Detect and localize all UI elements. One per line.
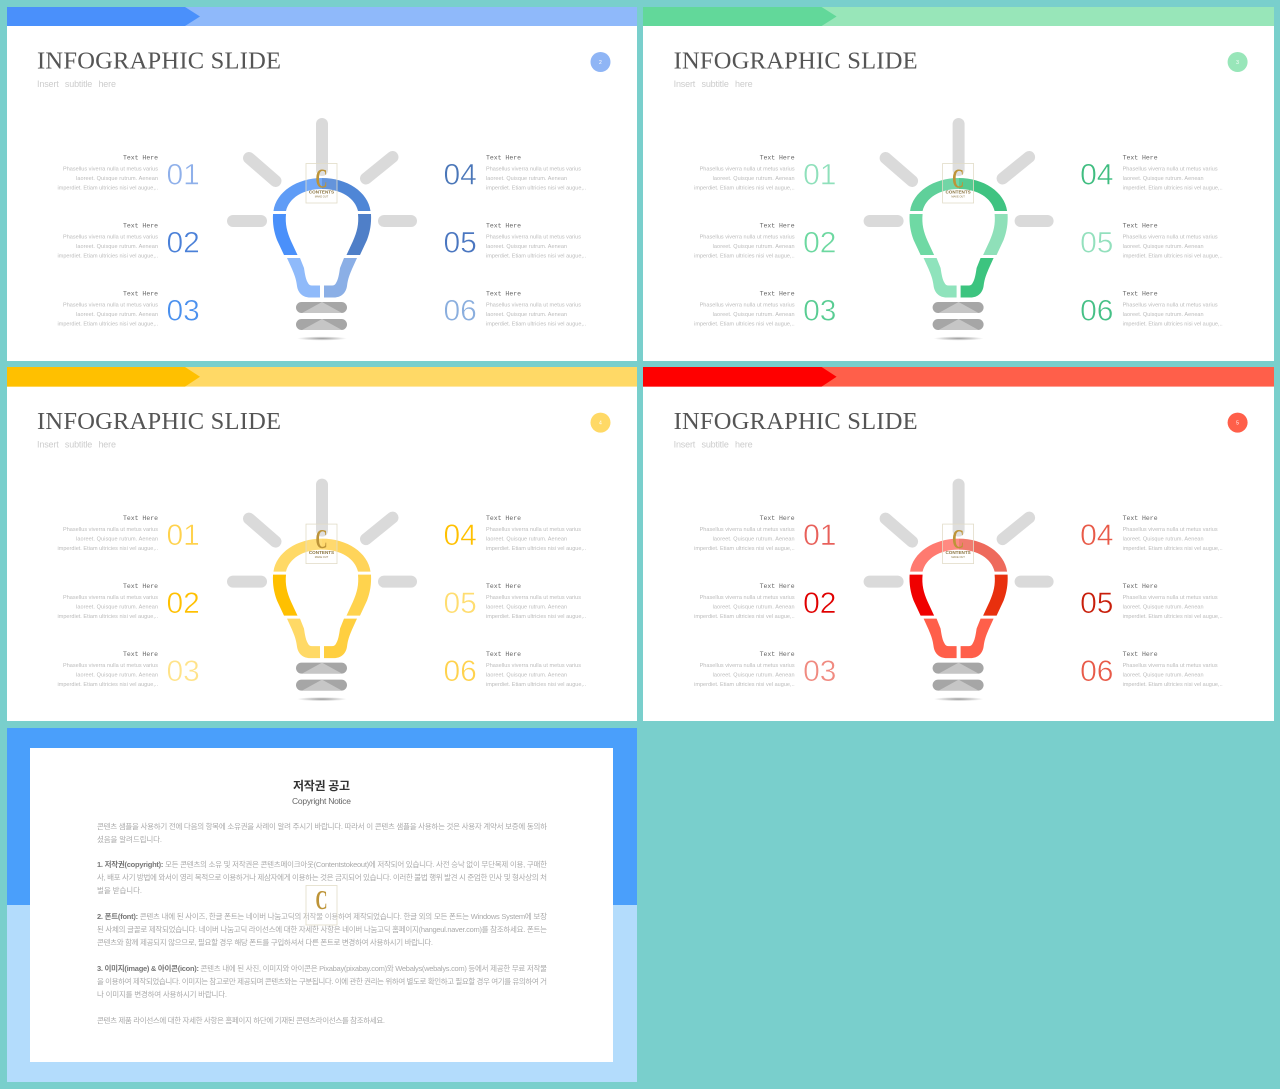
item 02: Text Here <box>760 222 795 230</box>
item 03: Text Here <box>123 651 158 658</box>
item 04: laoreet. Quisque rutrum. Aenean <box>486 176 567 182</box>
item 06 <box>444 651 586 688</box>
item 06 <box>1080 651 1223 688</box>
item 03: Phasellus viverra nulla ut metus varius <box>700 663 795 669</box>
page badge: 4 <box>599 421 602 427</box>
item 03: laoreet. Quisque rutrum. Aenean <box>76 673 158 679</box>
item 04 <box>1080 515 1223 552</box>
copyright subtitle: Copyright Notice <box>292 796 351 806</box>
item 04: Text Here <box>486 154 521 162</box>
item 04: Phasellus viverra nulla ut metus varius <box>486 527 581 533</box>
item 06: laoreet. Quisque rutrum. Aenean <box>486 312 567 318</box>
item 02: Phasellus viverra nulla ut metus varius <box>700 234 795 240</box>
section 1: copyright: 사, 배포 사기 방법에 와서이 영리 목적으로 이용하거나 제삼자에게 이용하는 것은 금지되어 있습니다. 이러한 불법 행위 발견 시 준엄한 민사 및 형사상의 처 <box>97 872 547 882</box>
watermark: CONTENTS <box>309 550 334 555</box>
item 06: imperdiet. Etiam ultricies nisi vel augue,.. <box>486 682 586 688</box>
panel: copyright notice <box>7 728 637 1082</box>
watermark <box>306 885 337 925</box>
item 02: imperdiet. Etiam ultricies nisi vel augue,.. <box>694 254 795 260</box>
item 04: 04 <box>1080 158 1113 192</box>
watermark: CONTENTS <box>945 550 971 555</box>
icon: light bulb <box>870 124 1048 340</box>
item 03: imperdiet. Etiam ultricies nisi vel augue,.. <box>694 322 795 328</box>
item 03: Phasellus viverra nulla ut metus varius <box>63 302 158 308</box>
item 03: Text Here <box>760 290 795 298</box>
item 05 <box>444 222 586 260</box>
item 04: imperdiet. Etiam ultricies nisi vel augue,.. <box>486 186 586 192</box>
item 06: 06 <box>1080 655 1113 688</box>
item 05: laoreet. Quisque rutrum. Aenean <box>1123 605 1204 611</box>
item 05: Phasellus viverra nulla ut metus varius <box>486 234 581 240</box>
item 01: Text Here <box>123 515 158 522</box>
icon: light bulb <box>870 485 1048 701</box>
title: INFOGRAPHIC SLIDE <box>674 48 918 74</box>
section 3: image and icon: 을 이용하여 제작되었습니다. 이미지는 참고로만 제공되며 콘텐츠와는 구분됩니다. 이에 관한 권리는 위하여 별도로 확인하고 필요할 경우 여기를 유의하여 거 <box>97 976 547 986</box>
item 01: imperdiet. Etiam ultricies nisi vel augue,.. <box>694 186 795 192</box>
item 04 <box>444 154 586 192</box>
item 06: Phasellus viverra nulla ut metus varius <box>1123 302 1218 308</box>
item 01: 01 <box>803 158 836 192</box>
item 03: Phasellus viverra nulla ut metus varius <box>63 663 158 669</box>
item 01: laoreet. Quisque rutrum. Aenean <box>76 176 158 182</box>
item 01: imperdiet. Etiam ultricies nisi vel augue,.. <box>58 546 158 552</box>
item 02: Phasellus viverra nulla ut metus varius <box>63 234 158 240</box>
watermark: C <box>952 164 964 194</box>
item 04: Text Here <box>1123 515 1158 522</box>
copyright title: 저작권 공고 <box>293 778 350 793</box>
item 03: laoreet. Quisque rutrum. Aenean <box>713 673 795 679</box>
watermark <box>943 524 974 564</box>
item 04: imperdiet. Etiam ultricies nisi vel augue,.. <box>1123 546 1223 552</box>
item 06: Phasellus viverra nulla ut metus varius <box>486 302 581 308</box>
item 03: imperdiet. Etiam ultricies nisi vel augue,.. <box>58 682 158 688</box>
intro paragraph: 콘텐츠 샘플을 사용하기 전에 다음의 항목에 소유권을 사례이 알려 주시기 바랍니다. 따라서 이 콘텐츠 샘플을 사용하는 것은 사용자 계약서 보증에 동의하 <box>97 821 547 831</box>
item 05: imperdiet. Etiam ultricies nisi vel augue,.. <box>486 614 586 620</box>
item 03: laoreet. Quisque rutrum. Aenean <box>713 312 795 318</box>
item 01 <box>58 515 200 552</box>
item 06 <box>444 290 586 328</box>
item 05: Phasellus viverra nulla ut metus varius <box>1123 234 1218 240</box>
item 04 <box>444 515 586 552</box>
item 05: 05 <box>1080 587 1113 620</box>
item 02: laoreet. Quisque rutrum. Aenean <box>713 244 795 250</box>
item 03 <box>694 651 836 688</box>
section 3: image and icon: 나 이미지를 변경하여 사용하시기 바랍니다. <box>97 989 227 999</box>
watermark: CONTENTS <box>309 190 334 194</box>
section 2: font: 된 사체의 글꼴로 제작되었습니다. 네이버 나눔고딕 라이선스에 대한 자세한 사항은 네이버 나눔고딕 홈페이지(hangeul.naver.com)를 참조하세요. 폰트는 <box>97 924 547 934</box>
title: INFOGRAPHIC SLIDE <box>37 48 281 74</box>
page badge <box>1228 413 1248 433</box>
item 06: Text Here <box>1123 290 1158 298</box>
item 04: laoreet. Quisque rutrum. Aenean <box>1123 176 1204 182</box>
item 01: Phasellus viverra nulla ut metus varius <box>63 527 158 533</box>
watermark <box>943 164 974 203</box>
item 06: 06 <box>444 655 477 688</box>
item 06: imperdiet. Etiam ultricies nisi vel augue,.. <box>486 322 586 328</box>
section 1: copyright <box>97 859 547 895</box>
section 2: font: 콘텐츠와 함께 제공되지 않으므로, 필요할 경우 해당 폰트를 구입하셔서 다른 폰트로 변경하여 사용하시기 바랍니다. <box>97 937 433 947</box>
item 05: Text Here <box>1123 583 1158 590</box>
item 06: Text Here <box>486 290 521 298</box>
item 06: laoreet. Quisque rutrum. Aenean <box>486 673 567 679</box>
item 02 <box>694 222 836 260</box>
item 02: laoreet. Quisque rutrum. Aenean <box>713 605 795 611</box>
item 03 <box>694 290 836 328</box>
item 05: laoreet. Quisque rutrum. Aenean <box>486 605 567 611</box>
item 01 <box>694 515 836 552</box>
item 02: imperdiet. Etiam ultricies nisi vel augue,.. <box>694 614 795 620</box>
item 05 <box>444 583 586 620</box>
item 04: 04 <box>1080 519 1113 552</box>
item 03: Text Here <box>123 290 158 298</box>
item 01: Phasellus viverra nulla ut metus varius <box>63 166 158 172</box>
item 02: imperdiet. Etiam ultricies nisi vel augue,.. <box>58 254 158 260</box>
page badge <box>590 413 610 433</box>
item 05 <box>1080 583 1223 620</box>
item 06 <box>1080 290 1223 328</box>
item 03: imperdiet. Etiam ultricies nisi vel augue,.. <box>58 322 158 328</box>
watermark <box>306 164 337 203</box>
item 04 <box>1080 154 1223 192</box>
item 01 <box>58 154 200 192</box>
item 02 <box>694 583 836 620</box>
item 01: Phasellus viverra nulla ut metus varius <box>700 527 795 533</box>
item 01: laoreet. Quisque rutrum. Aenean <box>76 537 158 543</box>
watermark: MAKE OUT <box>315 555 329 559</box>
item 05: Phasellus viverra nulla ut metus varius <box>486 595 581 601</box>
item 04: Phasellus viverra nulla ut metus varius <box>1123 166 1218 172</box>
item 02: 02 <box>166 226 200 260</box>
item 01: imperdiet. Etiam ultricies nisi vel augue,.. <box>694 546 795 552</box>
item 01: laoreet. Quisque rutrum. Aenean <box>713 537 795 543</box>
panel: red slide <box>643 367 1274 721</box>
item 03 <box>58 290 200 328</box>
item 05: 05 <box>1080 226 1113 260</box>
item 01: Phasellus viverra nulla ut metus varius <box>700 166 795 172</box>
item 03: imperdiet. Etiam ultricies nisi vel augue,.. <box>694 682 795 688</box>
item 02: laoreet. Quisque rutrum. Aenean <box>76 605 158 611</box>
section 3: image and icon <box>97 963 547 999</box>
item 03: laoreet. Quisque rutrum. Aenean <box>76 312 158 318</box>
item 02: 02 <box>803 587 836 620</box>
item 05: Text Here <box>486 222 521 230</box>
item 03: 03 <box>166 294 200 328</box>
item 03 <box>58 651 200 688</box>
item 02: Phasellus viverra nulla ut metus varius <box>700 595 795 601</box>
intro paragraph <box>97 821 547 844</box>
watermark: MAKE OUT <box>951 555 965 559</box>
title: INFOGRAPHIC SLIDE <box>37 408 281 435</box>
item 04: 04 <box>444 519 477 552</box>
watermark <box>306 524 337 564</box>
item 03: 03 <box>166 655 200 688</box>
panel: blue slide <box>7 7 637 361</box>
item 03: Text Here <box>760 651 795 658</box>
section 2: font: 2. 폰트(font): 콘텐츠 내에 된 사이즈, 한글 폰트는 네이버 나눔고딕의 저작물 이용하여 제작되었습니다. 한글 외의 모든 폰트는 Windows System에 보장 <box>97 911 547 921</box>
item 02: Text Here <box>123 222 158 230</box>
panel: green slide <box>643 7 1274 361</box>
item 06: Phasellus viverra nulla ut metus varius <box>486 663 581 669</box>
item 01: Text Here <box>123 154 158 162</box>
page badge <box>1228 52 1248 72</box>
item 06: laoreet. Quisque rutrum. Aenean <box>1123 312 1204 318</box>
item 03: Phasellus viverra nulla ut metus varius <box>700 302 795 308</box>
banner: green arrow <box>643 7 1274 26</box>
item 02 <box>58 222 200 260</box>
section 2: font <box>97 911 547 947</box>
item 06: imperdiet. Etiam ultricies nisi vel augue,.. <box>1123 682 1223 688</box>
section 1: copyright: 벌을 받습니다. <box>97 885 142 895</box>
item 01: 01 <box>166 519 200 552</box>
subtitle: Insert subtitle here <box>37 440 116 450</box>
item 05: 05 <box>444 587 477 620</box>
item 02: 02 <box>166 587 200 620</box>
item 02: Text Here <box>123 583 158 590</box>
item 01: imperdiet. Etiam ultricies nisi vel augue,.. <box>58 186 158 192</box>
subtitle: Insert subtitle here <box>674 440 753 450</box>
item 05: laoreet. Quisque rutrum. Aenean <box>1123 244 1204 250</box>
page badge <box>590 52 610 72</box>
item 04: Text Here <box>486 515 521 522</box>
item 05: imperdiet. Etiam ultricies nisi vel augue,.. <box>1123 614 1223 620</box>
item 02: Phasellus viverra nulla ut metus varius <box>63 595 158 601</box>
item 01 <box>694 154 836 192</box>
subtitle: Insert subtitle here <box>674 79 753 89</box>
item 03: 03 <box>803 294 836 328</box>
item 04: Text Here <box>1123 154 1158 162</box>
watermark: C <box>316 885 328 915</box>
item 04: 04 <box>444 158 477 192</box>
item 05: imperdiet. Etiam ultricies nisi vel augue,.. <box>1123 254 1223 260</box>
item 03: 03 <box>803 655 836 688</box>
item 05: Text Here <box>486 583 521 590</box>
item 05: imperdiet. Etiam ultricies nisi vel augue,.. <box>486 254 586 260</box>
section 1: copyright: 1. 저작권(copyright): 모든 콘텐츠의 소유 및 저작권은 콘텐츠메이크아웃(Contentstokeout)에 저작되어 있습니다. 사전 승낙 없이 무단복제 이용, 구매한 <box>97 859 547 869</box>
title: INFOGRAPHIC SLIDE <box>674 408 918 435</box>
watermark: MAKE OUT <box>315 194 329 198</box>
item 05: Text Here <box>1123 222 1158 230</box>
item 02: imperdiet. Etiam ultricies nisi vel augue,.. <box>58 614 158 620</box>
intro paragraph: 셨음을 알려드립니다. <box>97 834 162 844</box>
section 3: image and icon: 3. 이미지(image) & 아이콘(icon): 콘텐츠 내에 된 사진, 이미지와 아이콘은 Pixabay(pixabay.com)와 Webalys(webalys.com) 등에서 제공한 무료 저작물 <box>97 963 547 973</box>
item 02 <box>58 583 200 620</box>
item 01: Text Here <box>760 154 795 162</box>
banner: red arrow <box>643 367 1274 387</box>
watermark: C <box>316 524 328 554</box>
banner: blue arrow <box>7 7 637 26</box>
page badge: 2 <box>599 60 602 66</box>
item 01: 01 <box>166 158 200 192</box>
subtitle: Insert subtitle here <box>37 79 116 89</box>
item 04: imperdiet. Etiam ultricies nisi vel augue,.. <box>1123 186 1223 192</box>
item 01: Text Here <box>760 515 795 522</box>
item 06: laoreet. Quisque rutrum. Aenean <box>1123 673 1204 679</box>
watermark: C <box>316 164 328 194</box>
item 02: 02 <box>803 226 836 260</box>
item 04: Phasellus viverra nulla ut metus varius <box>1123 527 1218 533</box>
item 05 <box>1080 222 1223 260</box>
item 06: Phasellus viverra nulla ut metus varius <box>1123 663 1218 669</box>
panel: yellow slide <box>7 367 637 721</box>
item 04: Phasellus viverra nulla ut metus varius <box>486 166 581 172</box>
icon: light bulb <box>233 485 411 701</box>
item 05: laoreet. Quisque rutrum. Aenean <box>486 244 567 250</box>
watermark: MAKE OUT <box>951 194 965 198</box>
icon: light bulb <box>233 124 411 340</box>
item 01: 01 <box>803 519 836 552</box>
watermark: CONTENTS <box>945 190 971 194</box>
item 05: Phasellus viverra nulla ut metus varius <box>1123 595 1218 601</box>
closing line: 콘텐츠 제품 라이선스에 대한 자세한 사항은 홈페이지 하단에 기재된 콘텐츠라이선스를 참조하세요. <box>97 1015 385 1025</box>
item 06: 06 <box>1080 294 1113 328</box>
item 04: imperdiet. Etiam ultricies nisi vel augue,.. <box>486 546 586 552</box>
page badge: 5 <box>1236 421 1239 427</box>
item 05: 05 <box>444 226 477 260</box>
page badge: 3 <box>1236 60 1239 66</box>
item 06: Text Here <box>486 651 521 658</box>
item 06: Text Here <box>1123 651 1158 658</box>
item 02: Text Here <box>760 583 795 590</box>
watermark: C <box>952 524 964 554</box>
item 02: laoreet. Quisque rutrum. Aenean <box>76 244 158 250</box>
item 06: imperdiet. Etiam ultricies nisi vel augue,.. <box>1123 322 1223 328</box>
item 04: laoreet. Quisque rutrum. Aenean <box>1123 537 1204 543</box>
item 01: laoreet. Quisque rutrum. Aenean <box>713 176 795 182</box>
item 06: 06 <box>444 294 477 328</box>
item 04: laoreet. Quisque rutrum. Aenean <box>486 537 567 543</box>
banner: yellow arrow <box>7 367 637 387</box>
